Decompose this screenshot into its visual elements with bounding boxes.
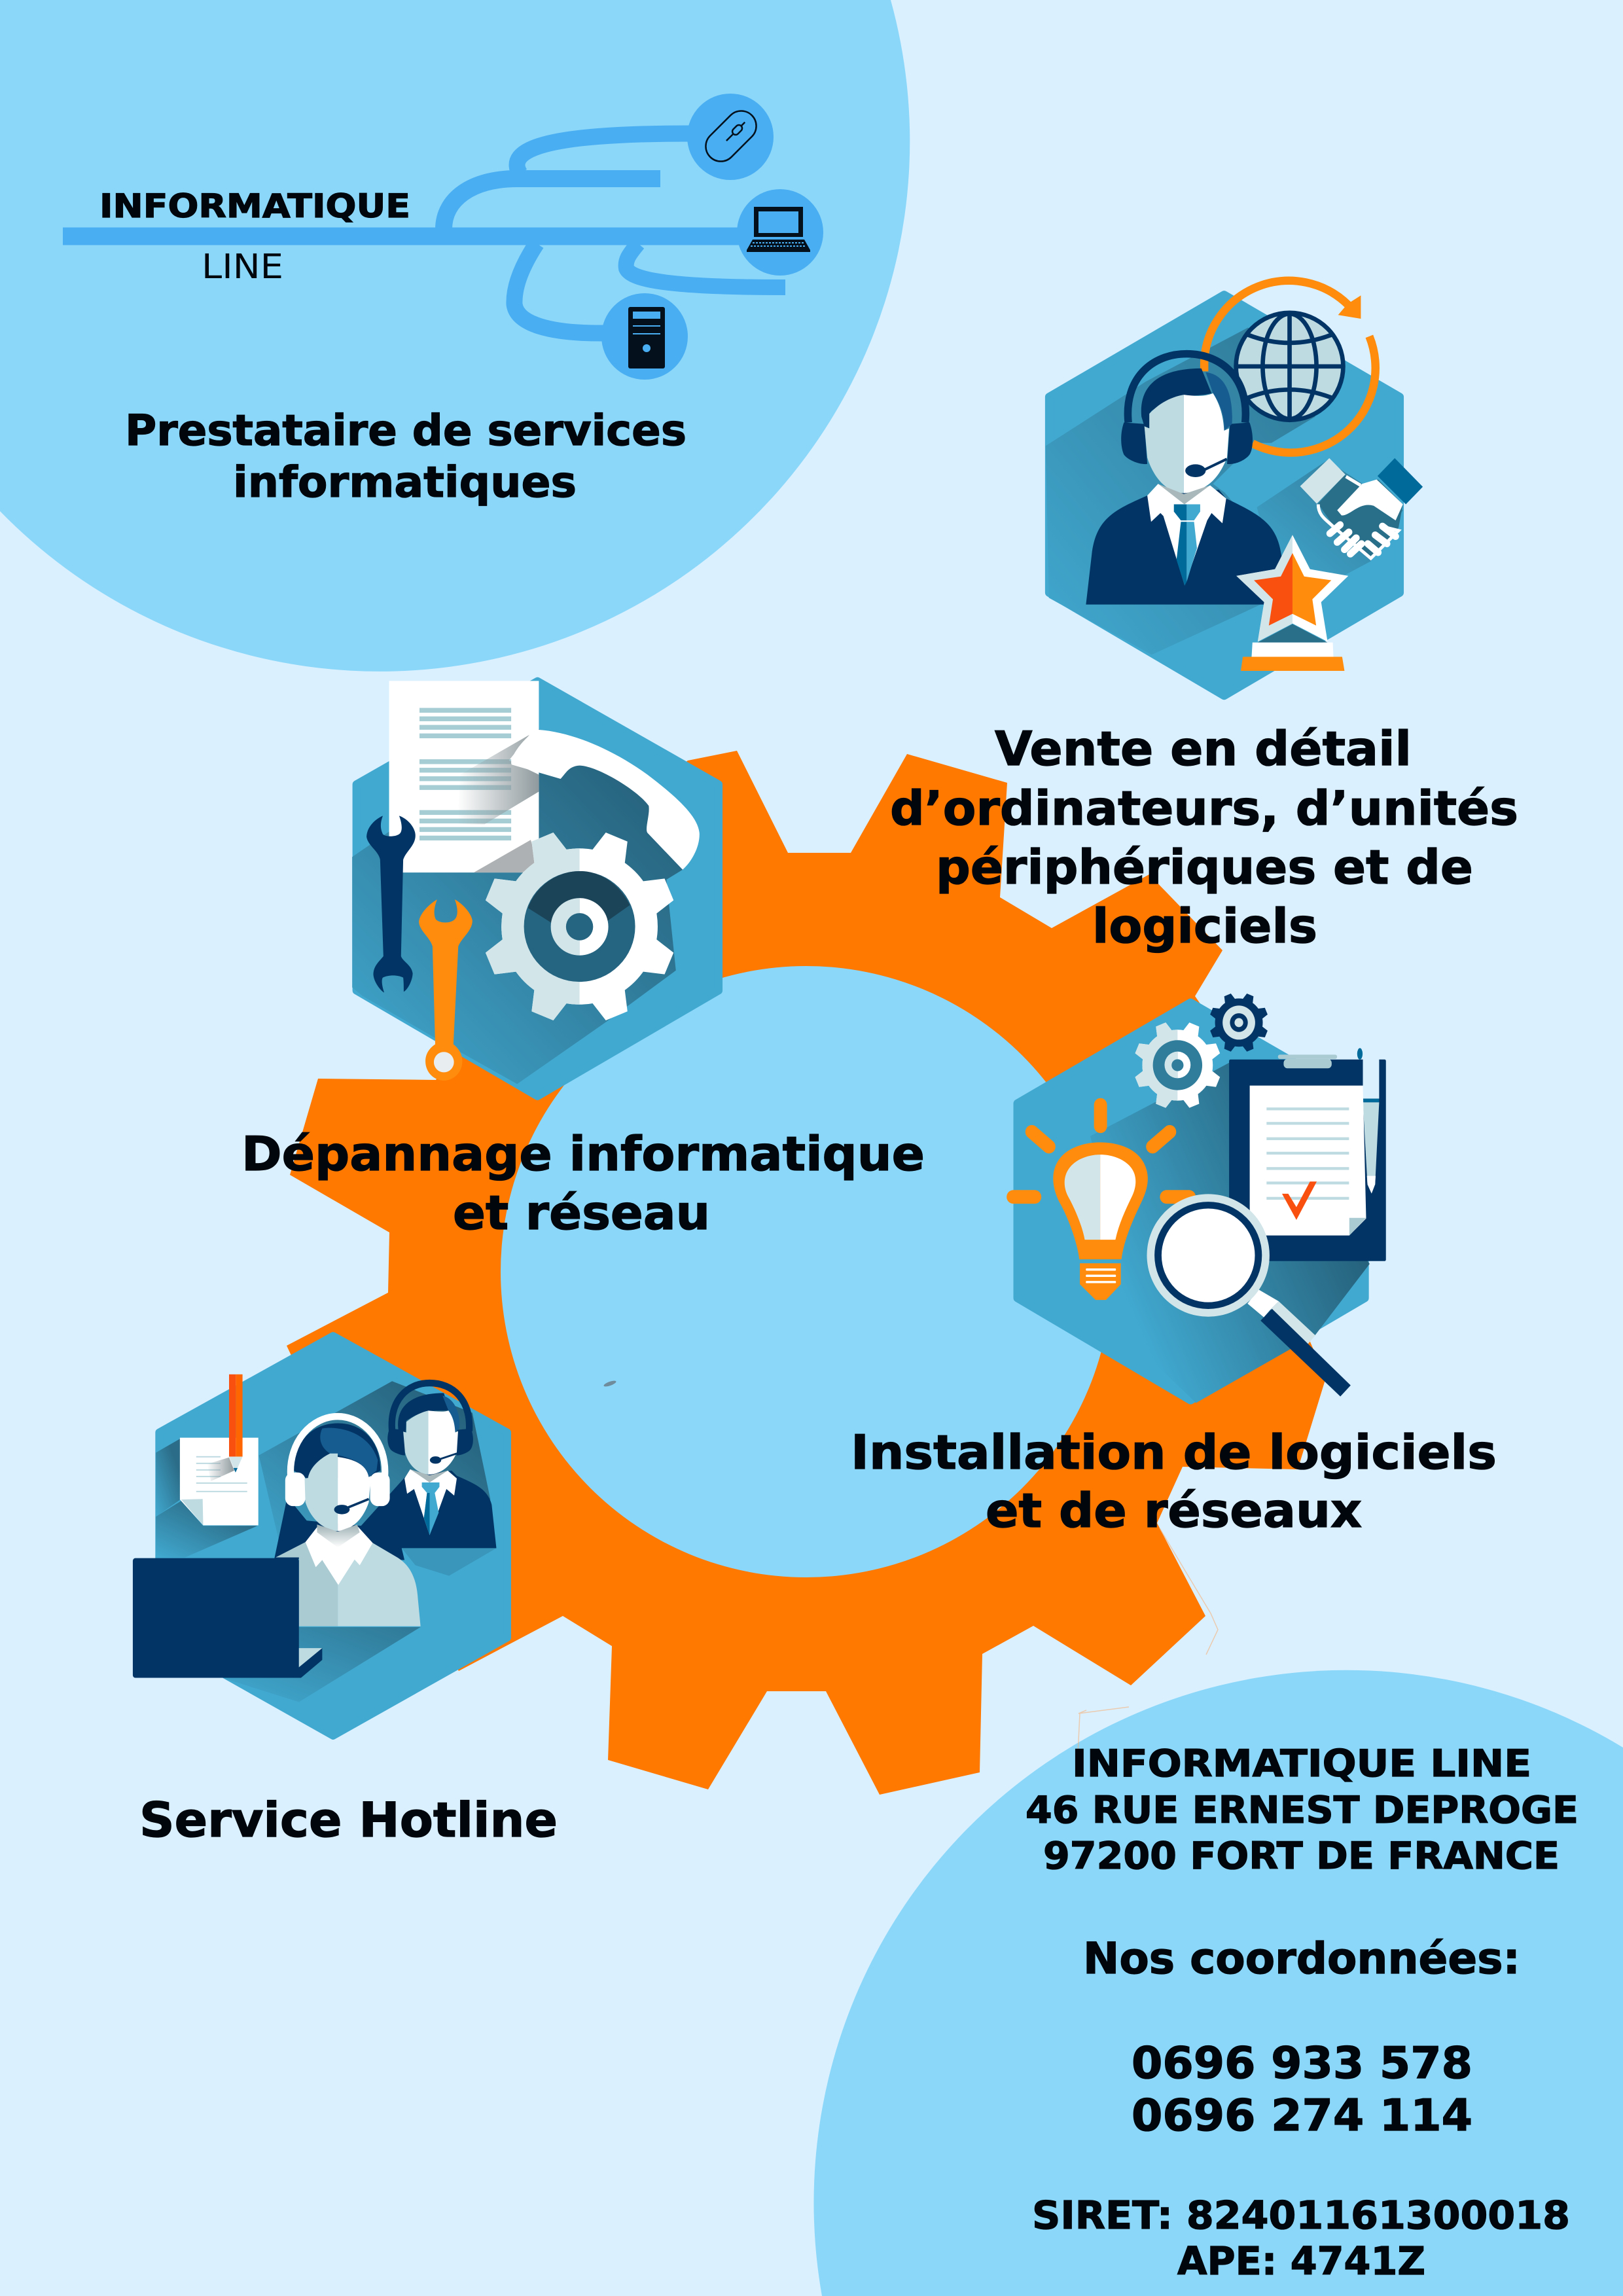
light bulb [1013, 1105, 1189, 1300]
text: sales service [890, 721, 1518, 954]
text: hotline service: Service Hotline [139, 1793, 558, 1848]
text: address block: 46 RUE ERNEST DEPROGE [1026, 1789, 1578, 1832]
long shadow [352, 729, 699, 1084]
hexagon background [1018, 1003, 1364, 1400]
globe [1234, 311, 1346, 422]
text: address block [1026, 1742, 1578, 1878]
telephone handset [511, 730, 700, 870]
long shadow [1046, 327, 1315, 655]
hexagon background [1050, 295, 1399, 695]
hexagon background [159, 1336, 507, 1736]
icon: mouse [687, 94, 774, 180]
magnifying glass [1147, 1194, 1351, 1397]
text: phone numbers: 0696 933 578 [1132, 2037, 1472, 2089]
text: sales service: logiciels [1092, 899, 1317, 954]
logo wordmark: LINE [202, 247, 283, 287]
logo: Informatique Line network [63, 94, 823, 380]
icon: hotline hexagon (paper, pencil, two agents, laptop) [133, 1336, 507, 1736]
orange refresh arrows [1204, 281, 1376, 453]
hexagon background [357, 681, 719, 1096]
heading: tagline: Prestataire de services [125, 406, 687, 456]
gear [483, 830, 676, 1023]
text: phone numbers [1132, 2037, 1472, 2141]
text: sales service: d’ordinateurs, d’unités [890, 781, 1518, 836]
heading: tagline: informatiques [233, 458, 577, 507]
text: company registration: SIRET: 82401161300018 [1032, 2193, 1570, 2238]
logo wordmark: INFORMATIQUE [99, 187, 410, 225]
logo cables [63, 134, 785, 333]
long shadows [156, 1439, 181, 1516]
long shadow [1069, 1062, 1370, 1403]
text: company registration: APE: 4741Z [1177, 2238, 1425, 2284]
icon: sales hexagon (agent, globe, handshake, star) [1046, 281, 1423, 695]
front agent [276, 1416, 421, 1626]
text: installation service: Installation de logiciels [851, 1425, 1497, 1480]
icon: tower computer [601, 293, 688, 380]
navy wrench [366, 816, 416, 993]
small navy gear [1209, 993, 1268, 1052]
clipboard [1229, 1048, 1386, 1261]
text: sales service: Vente en détail [995, 721, 1412, 776]
agent [1086, 354, 1285, 605]
paper and pencil [180, 1374, 259, 1525]
orange gear [287, 751, 1326, 1795]
laptop [133, 1558, 322, 1678]
panel: bottom-right contact circle [813, 1670, 1623, 2296]
icon: installation hexagon (gears, bulb, clipboard, magnifier) [1013, 993, 1386, 1403]
text: repair service: et réseau [453, 1185, 710, 1240]
handshake [1300, 458, 1423, 558]
text: address block: INFORMATIQUE LINE [1072, 1742, 1531, 1785]
text: installation service: et de réseaux [986, 1483, 1362, 1538]
text: repair service: Dépannage informatique [241, 1126, 925, 1181]
logo wordmark [99, 187, 410, 287]
heading: contact: Nos coordonnées: [1083, 1933, 1520, 1984]
text: company registration [1032, 2193, 1570, 2284]
star trophy [1236, 535, 1348, 671]
document [389, 681, 539, 872]
text: address block: 97200 FORT DE FRANCE [1043, 1835, 1560, 1878]
text: phone numbers: 0696 274 114 [1132, 2090, 1472, 2141]
small light gear [1134, 1022, 1221, 1109]
icon: laptop [737, 189, 823, 276]
rear agent [274, 1383, 496, 1560]
text: sales service: périphériques et de [936, 840, 1473, 895]
icon: repair hexagon (document, phone, gear, wrenches) [352, 681, 719, 1096]
panel: top-left logo circle [0, 0, 910, 672]
text: installation service [851, 1425, 1497, 1538]
orange wrench [419, 899, 473, 1081]
text: repair service [241, 1126, 925, 1240]
heading: tagline [125, 406, 687, 507]
